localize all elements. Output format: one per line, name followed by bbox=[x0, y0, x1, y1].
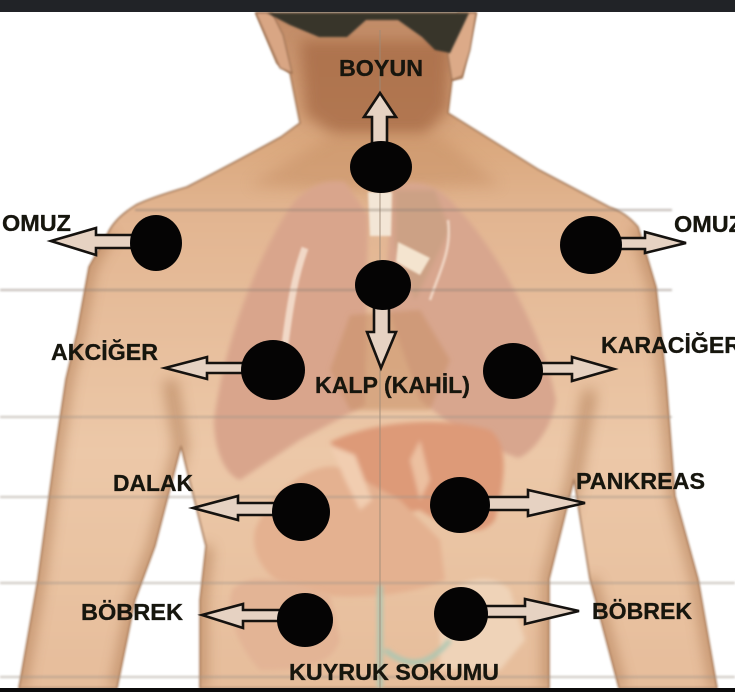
lung highlights bbox=[285, 220, 449, 345]
arrow: spleen bbox=[193, 496, 275, 520]
spine line bbox=[379, 30, 381, 688]
marker: lung bbox=[241, 340, 305, 400]
label: spleen: DALAK bbox=[113, 470, 193, 496]
lungs bbox=[214, 181, 556, 480]
arrow: up to neck bbox=[364, 93, 396, 145]
marker: spleen bbox=[272, 483, 330, 541]
label: neck: BOYUN bbox=[339, 55, 423, 81]
heart and stomach bbox=[254, 310, 504, 597]
top dark bar bbox=[0, 0, 735, 12]
arrow: left kidney bbox=[202, 604, 282, 628]
marker: heart bbox=[355, 260, 411, 310]
arrow: liver bbox=[538, 357, 614, 381]
hair bbox=[267, 13, 469, 53]
label: lung: AKCİĞER bbox=[51, 338, 158, 365]
intestines and kidneys bbox=[230, 579, 525, 688]
marker: left shoulder bbox=[130, 215, 182, 271]
bottom dark bar bbox=[0, 688, 735, 692]
arrow: right shoulder bbox=[612, 232, 686, 253]
label: right kidney: BÖBREK bbox=[592, 598, 692, 624]
marker: liver bbox=[483, 343, 543, 399]
label: left shoulder: OMUZ bbox=[2, 210, 71, 236]
horizontal ruler lines bbox=[0, 210, 735, 677]
marker: left kidney bbox=[277, 593, 333, 647]
trachea bbox=[368, 192, 392, 236]
marker: neck bbox=[350, 141, 412, 193]
bronchi highlight bbox=[396, 242, 430, 275]
arrow: pancreas bbox=[485, 490, 585, 516]
marker: right shoulder bbox=[560, 216, 622, 274]
pressure point markers bbox=[130, 141, 622, 647]
back muscle shadow bbox=[262, 139, 490, 191]
arrow: right kidney bbox=[484, 599, 579, 624]
label: left kidney: BÖBREK bbox=[81, 599, 183, 625]
marker: pancreas bbox=[430, 477, 490, 533]
arrow: left shoulder bbox=[51, 228, 135, 255]
label: tailbone: KUYRUK SOKUMU bbox=[289, 659, 499, 685]
marker: right kidney bbox=[434, 587, 488, 641]
label: heart: KALP (KAHİL) bbox=[315, 372, 470, 398]
arrow: down to heart bbox=[367, 305, 396, 368]
arrow: lung bbox=[165, 357, 245, 379]
label: pancreas: PANKREAS bbox=[576, 468, 705, 494]
left ear bbox=[256, 13, 292, 73]
right ear bbox=[448, 13, 476, 80]
neck shadow bbox=[300, 40, 450, 135]
